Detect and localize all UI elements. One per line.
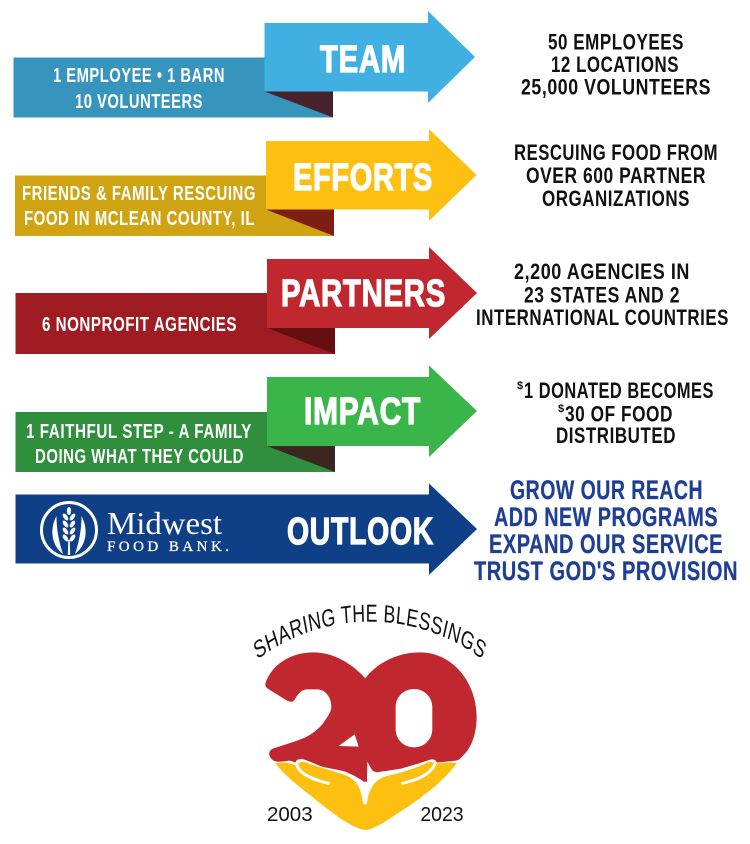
partners arrow	[267, 247, 477, 339]
efforts arrow	[266, 129, 476, 221]
impact then text: DOING WHAT THEY COULD	[35, 445, 244, 468]
efforts ribbon band	[15, 176, 334, 236]
efforts now text	[514, 140, 718, 211]
partners now text: 23 STATES AND 2	[524, 282, 680, 308]
panel: outlook row	[16, 475, 738, 586]
impact ribbon band	[16, 412, 335, 472]
team arrow	[264, 11, 475, 103]
outlook goals text	[474, 475, 738, 586]
impact ribbon fold	[267, 446, 335, 472]
curved tagline: SHARING THE BLESSINGS	[254, 604, 486, 658]
efforts now text: ORGANIZATIONS	[542, 186, 690, 211]
anniversary logo	[254, 604, 486, 830]
heading: impact: IMPACT	[304, 391, 421, 433]
icon: yellow hands	[275, 762, 457, 830]
partners now text	[476, 259, 729, 330]
partners then text: 6 NONPROFIT AGENCIES	[42, 313, 237, 336]
icon: wheat emblem	[42, 502, 96, 558]
team now text: 12 LOCATIONS	[551, 52, 679, 77]
team ribbon band	[14, 58, 333, 118]
team ribbon fold	[264, 92, 333, 118]
impact now text: 30 OF FOOD	[565, 402, 673, 426]
heading: partners: PARTNERS	[281, 273, 446, 315]
team now text: 25,000 VOLUNTEERS	[521, 74, 711, 100]
impact then text	[26, 420, 252, 468]
impact now text: DISTRIBUTED	[556, 423, 676, 448]
team then text	[53, 64, 225, 113]
panel: efforts row	[15, 129, 718, 236]
team now text	[521, 30, 711, 100]
panel: partners row	[16, 247, 729, 354]
impact now text	[517, 378, 714, 448]
right thumb line	[403, 765, 435, 783]
year 2023: 2023	[420, 804, 464, 826]
panel: impact row	[16, 366, 714, 472]
impact then text: 1 FAITHFUL STEP - A FAMILY	[26, 420, 252, 443]
impact arrow	[267, 366, 477, 457]
partners now text: 2,200 AGENCIES IN	[514, 259, 690, 284]
logo subline: FOOD BANK.	[107, 539, 229, 555]
heading: team: TEAM	[320, 39, 406, 81]
efforts then text: FRIENDS & FAMILY RESCUING	[22, 182, 256, 205]
efforts ribbon fold	[266, 210, 334, 236]
logo wordmark: Midwest	[107, 505, 222, 541]
partners ribbon band	[16, 293, 335, 354]
team then text: 10 VOLUNTEERS	[75, 90, 203, 113]
red number 20 heart	[265, 652, 477, 782]
heading: efforts: EFFORTS	[293, 157, 433, 199]
year 2003: 2003	[267, 804, 313, 826]
partners ribbon fold	[267, 328, 335, 354]
efforts then text: FOOD IN MCLEAN COUNTY, IL	[24, 207, 255, 230]
efforts now text: OVER 600 PARTNER	[526, 163, 706, 188]
heading: outlook: OUTLOOK	[287, 511, 434, 553]
outlook arrow	[16, 484, 477, 575]
left thumb line	[297, 765, 328, 783]
impact now text: $	[517, 380, 523, 392]
impact now text: $	[558, 403, 564, 415]
efforts then text	[22, 182, 256, 230]
team then text: 1 EMPLOYEE • 1 BARN	[53, 64, 225, 87]
panel: team row	[14, 11, 711, 118]
team now text: 50 EMPLOYEES	[548, 30, 684, 54]
logo: Midwest Food Bank	[42, 502, 229, 558]
